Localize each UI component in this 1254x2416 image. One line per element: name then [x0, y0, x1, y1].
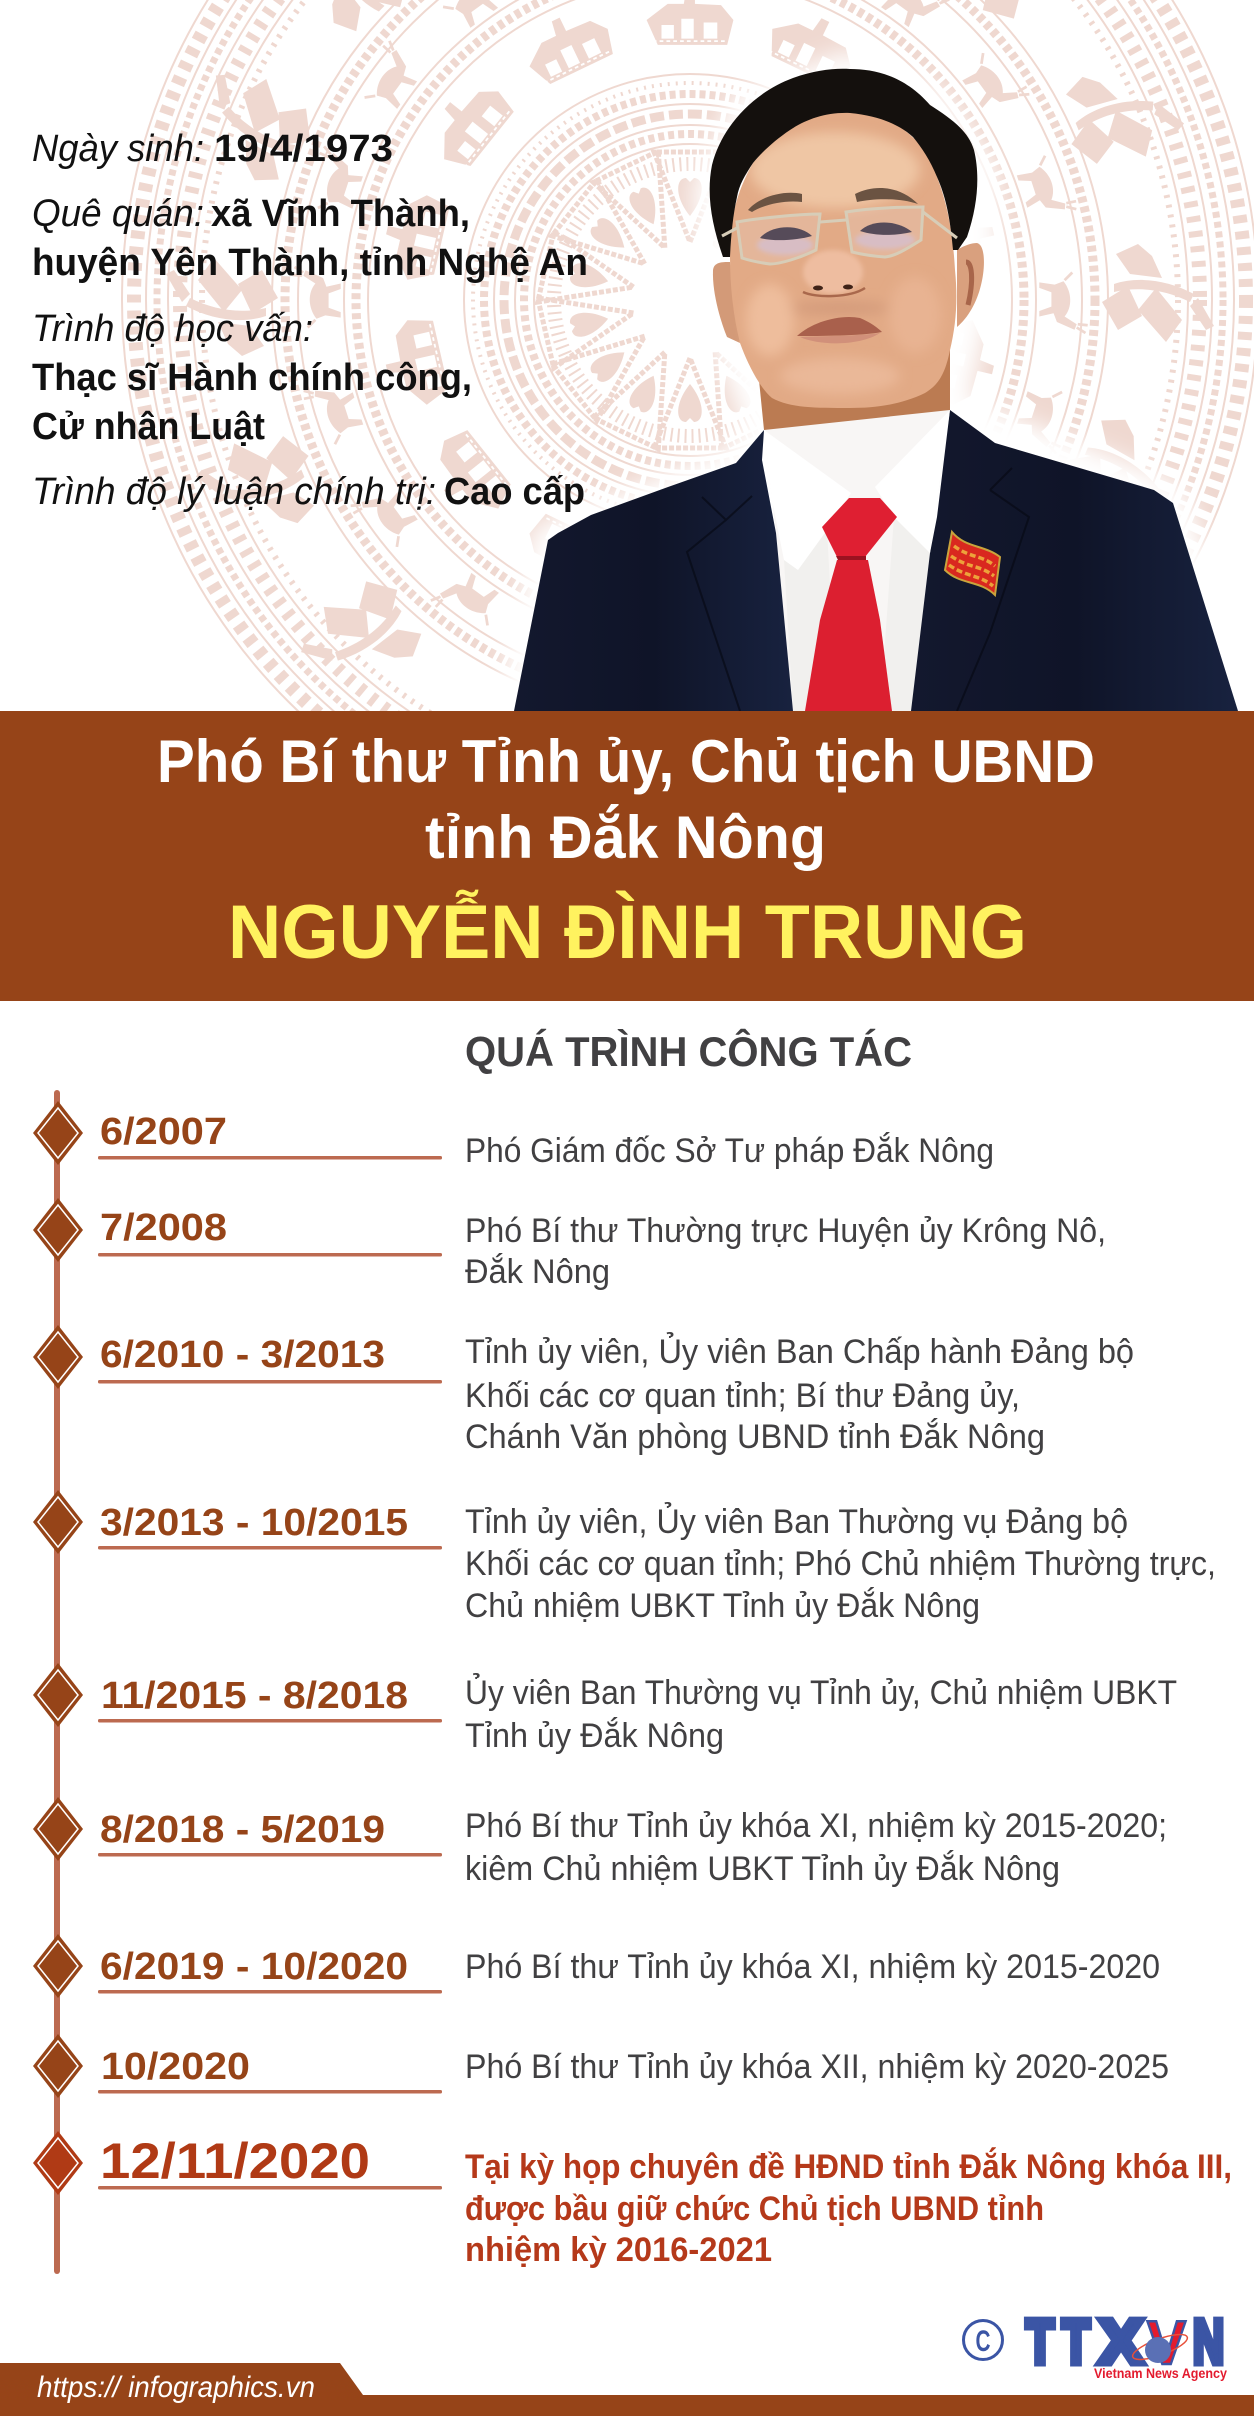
mouth [797, 317, 882, 336]
website url: https:// infographics.vn [37, 2371, 315, 2404]
education: Cử nhân Luật [32, 406, 265, 448]
entry 3: Tỉnh ủy viên, Ủy viên Ban Chấp hành Đảng bộ [465, 1333, 1134, 1371]
footer bar [0, 2363, 1254, 2416]
date 8: 10/2020 [101, 2046, 250, 2088]
entry 9 highlighted: nhiệm kỳ 2016-2021 [465, 2231, 772, 2269]
date 2: 7/2008 [100, 1207, 227, 1249]
education: Thạc sĩ Hành chính công, [32, 357, 472, 399]
timeline [33, 1090, 1232, 2274]
logo: TTXVN [964, 2308, 1227, 2381]
date 7: 6/2019 - 10/2020 [100, 1946, 408, 1988]
entry 4: Chủ nhiệm UBKT Tỉnh ủy Đắk Nông [465, 1587, 980, 1625]
section heading: QUÁ TRÌNH CÔNG TÁC [465, 1027, 912, 1075]
timeline axis [54, 1090, 60, 2274]
entry 3: Chánh Văn phòng UBND tỉnh Đắk Nông [465, 1418, 1045, 1456]
date 1: 6/2007 [100, 1111, 227, 1153]
globe and orbit [1130, 2330, 1190, 2364]
marker 9 highlighted [33, 2131, 83, 2195]
date 3: 6/2010 - 3/2013 [100, 1334, 385, 1376]
background: bronze drum pattern [122, 0, 1254, 868]
marker 3 [33, 1325, 83, 1389]
glasses [722, 207, 957, 264]
marker 6 [33, 1797, 83, 1861]
political theory: Cao cấp [444, 471, 585, 513]
education: Trình độ học vấn: [32, 308, 313, 350]
entry 3 [465, 1333, 1134, 1456]
entry 7: Phó Bí thư Tỉnh ủy khóa XI, nhiệm kỳ 2015-2020 [465, 1948, 1160, 1986]
marker 7 [33, 1934, 83, 1998]
lapel folds [687, 468, 1029, 711]
logotype letters: N [1193, 2308, 1224, 2377]
suit jacket left [514, 430, 793, 711]
agency name: Vietnam News Agency [1094, 2365, 1227, 2381]
marker 4 [33, 1490, 83, 1554]
title line 1: Phó Bí thư Tỉnh ủy, Chủ tịch UBND [157, 728, 1095, 795]
suit jacket right [911, 410, 1238, 711]
entry 5: Ủy viên Ban Thường vụ Tỉnh ủy, Chủ nhiệm UBKT [465, 1674, 1177, 1712]
entry 2 [465, 1212, 1106, 1291]
entry 5: Tỉnh ủy Đắk Nông [465, 1717, 724, 1755]
date 4: 3/2013 - 10/2015 [100, 1502, 408, 1544]
political theory: Trình độ lý luận chính trị: [32, 471, 436, 513]
red tie [822, 498, 897, 557]
entry 1: Phó Giám đốc Sở Tư pháp Đắk Nông [465, 1132, 994, 1170]
entry 6: Phó Bí thư Tỉnh ủy khóa XI, nhiệm kỳ 2015-2020; [465, 1807, 1167, 1845]
entry 6: kiêm Chủ nhiệm UBKT Tỉnh ủy Đắk Nông [465, 1850, 1060, 1888]
portrait photo [514, 69, 1238, 711]
hometown: huyện Yên Thành, tỉnh Nghệ An [32, 242, 588, 284]
title banner [0, 711, 1254, 1001]
date 5: 11/2015 - 8/2018 [101, 1675, 408, 1717]
entry 4: Khối các cơ quan tỉnh; Phó Chủ nhiệm Thường trực, [465, 1545, 1216, 1583]
education [32, 308, 472, 448]
face highlights [746, 132, 941, 394]
entry 9 highlighted: được bầu giữ chức Chủ tịch UBND tỉnh [465, 2190, 1044, 2228]
logotype letters: T [1062, 2308, 1090, 2377]
shirt [764, 410, 950, 711]
hometown: Quê quán: [32, 193, 204, 235]
date 9 highlighted: 12/11/2020 [100, 2133, 370, 2189]
birth date [32, 128, 393, 170]
date 6: 8/2018 - 5/2019 [100, 1809, 385, 1851]
hometown: xã Vĩnh Thành, [211, 193, 470, 235]
birth date: Ngày sinh: [32, 128, 204, 170]
entry 8: Phó Bí thư Tỉnh ủy khóa XII, nhiệm kỳ 2020-2025 [465, 2048, 1169, 2086]
logotype letters [1026, 2308, 1224, 2378]
entry 4: Tỉnh ủy viên, Ủy viên Ban Thường vụ Đảng bộ [465, 1503, 1128, 1541]
copyright icon [964, 2320, 1002, 2360]
eyes [760, 227, 812, 240]
entry 2: Đắk Nông [465, 1253, 610, 1291]
marker 8 [33, 2034, 83, 2098]
neck [757, 340, 950, 492]
eyebrows [748, 193, 802, 212]
entry 4 [465, 1503, 1216, 1625]
personal info text [32, 128, 588, 513]
delegate pin [945, 532, 1000, 595]
logotype letters: V [1147, 2309, 1186, 2378]
logotype letters: X [1099, 2308, 1143, 2377]
logotype letters: T [1026, 2308, 1054, 2377]
marker 2 [33, 1198, 83, 1262]
name: NGUYỄN ĐÌNH TRUNG [228, 889, 1027, 975]
ears [713, 262, 740, 343]
nose [803, 250, 863, 294]
birth date: 19/4/1973 [214, 128, 393, 170]
face [730, 110, 956, 408]
hometown [32, 193, 588, 284]
entry 6 [465, 1807, 1167, 1888]
white glow behind portrait [514, 69, 1238, 711]
title line 2: tỉnh Đắk Nông [425, 804, 826, 871]
marker 5 [33, 1663, 83, 1727]
entry 3: Khối các cơ quan tỉnh; Bí thư Đảng ủy, [465, 1377, 1020, 1415]
shirt collar [764, 430, 851, 570]
copyright icon: C [976, 2325, 990, 2358]
entry 2: Phó Bí thư Thường trực Huyện ủy Krông Nô, [465, 1212, 1106, 1250]
eye shading [757, 231, 915, 255]
underlines [98, 1156, 442, 2190]
hair [710, 69, 977, 257]
entry 5 [465, 1674, 1177, 1755]
entry 9 highlighted [465, 2148, 1232, 2269]
marker 1 [33, 1101, 83, 1165]
